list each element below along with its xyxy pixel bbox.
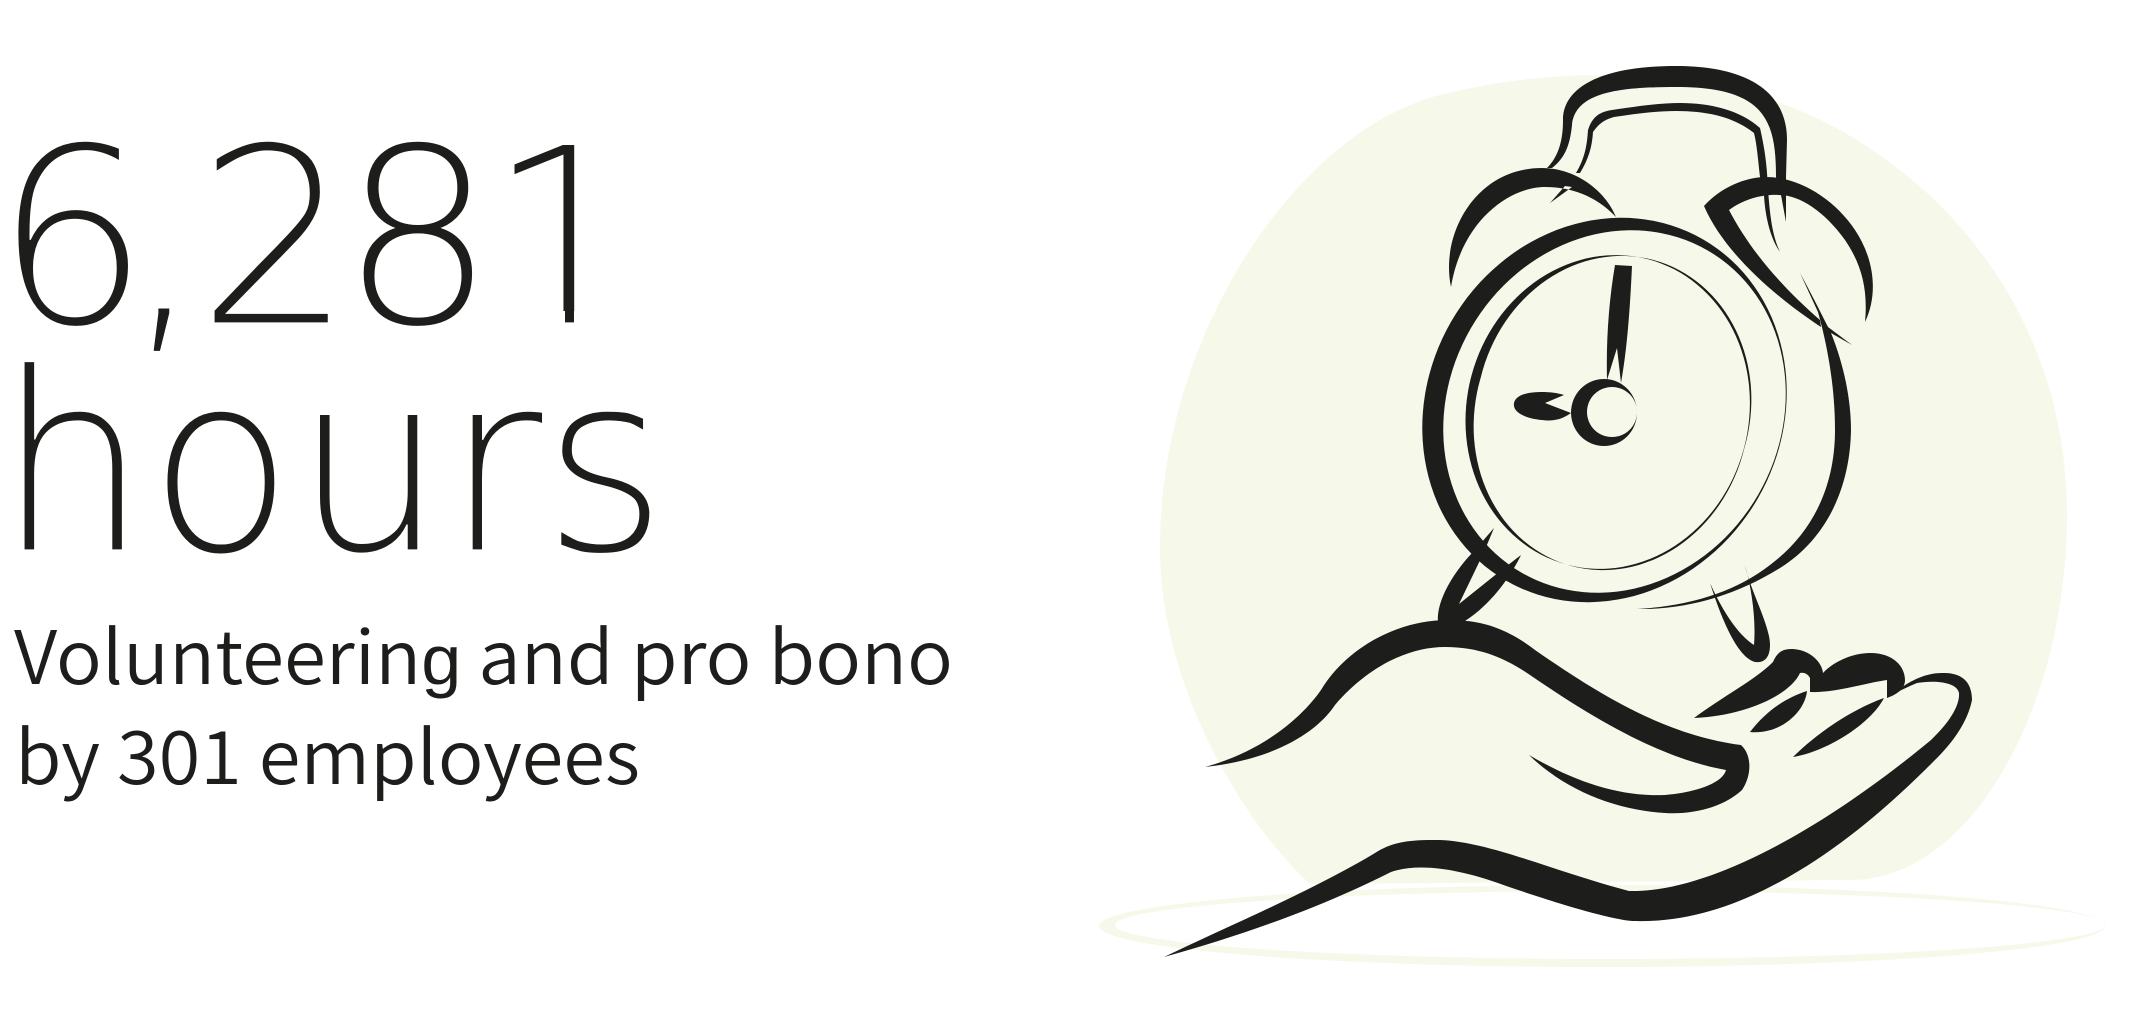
clock icon (1422, 66, 1873, 662)
upper hand and thumb (1205, 620, 1749, 813)
clock body crescent (1422, 218, 1787, 602)
fingertips (1694, 649, 1905, 718)
hand icon (1164, 620, 1972, 957)
headline unit: hours (0, 321, 667, 609)
left foot (1438, 528, 1521, 622)
hub crescent (1571, 379, 1637, 446)
left bell (1449, 168, 1616, 287)
finger stroke two (1750, 691, 1807, 732)
clock dial crescent (1465, 255, 1751, 570)
headline number: 6,281 (0, 96, 643, 381)
description line 1: Volunteering and pro bono (14, 599, 953, 706)
minute hand (1607, 265, 1632, 383)
outer body arc (1637, 273, 1852, 609)
right foot (1710, 565, 1770, 662)
description line 2: by 301 employees (15, 699, 640, 806)
clock handle outer (1547, 66, 1787, 222)
illustration: alarm clock resting on a hand (1099, 66, 2105, 967)
right bell (1704, 177, 1873, 327)
clock handle inner (1576, 103, 1780, 252)
hour hand (1514, 392, 1571, 420)
text block: headline and description (0, 96, 953, 806)
background blob (1160, 75, 2067, 884)
finger stroke three (1793, 698, 1884, 757)
ground ring (1099, 885, 2105, 967)
lower hand and palm (1164, 673, 1972, 957)
